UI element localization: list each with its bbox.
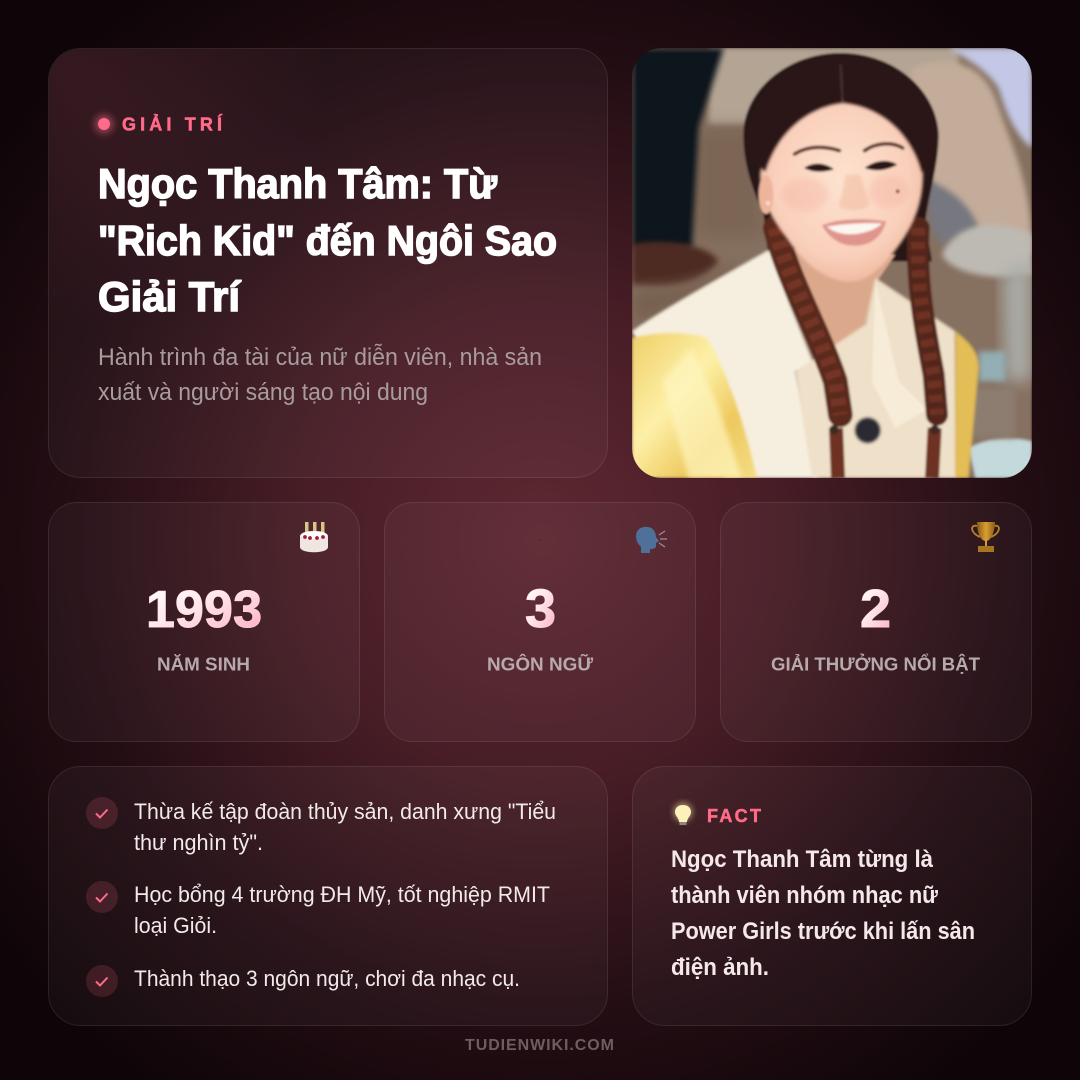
title: "Rich Kid" đến Ngôi Sao (98, 217, 557, 264)
panel: fact (632, 766, 1032, 1026)
icon: trophy (972, 522, 999, 552)
list item: languages: Thành thạo 3 ngôn ngữ, chơi đa nhạc cụ. (134, 966, 520, 991)
icon: speaking head (636, 527, 667, 553)
gold right (955, 331, 979, 478)
shirt (795, 278, 957, 478)
fact text: Ngọc Thanh Tâm từng là (671, 846, 934, 873)
fact text: điện ảnh. (671, 954, 769, 981)
list item: education: Học bổng 4 trường ĐH Mỹ, tốt nghiệp RMIT (134, 882, 550, 907)
category tag: GIẢI TRÍ (122, 114, 223, 134)
subtitle: Hành trình đa tài của nữ diễn viên, nhà sản (98, 344, 542, 371)
label: NĂM SINH (157, 654, 250, 674)
fact text: thành viên nhóm nhạc nữ (671, 882, 939, 909)
panel: highlights list (48, 766, 608, 1026)
list item: education: loại Giỏi. (134, 913, 217, 938)
title: Ngọc Thanh Tâm: Từ (98, 160, 498, 207)
title: Giải Trí (98, 273, 241, 320)
neck (793, 248, 897, 346)
value: 2 (860, 579, 891, 639)
gold sleeve (632, 333, 757, 478)
list item: heritage: thư nghìn tỷ". (134, 830, 263, 855)
braids (775, 228, 939, 478)
panel: stat languages (384, 502, 696, 742)
panel: header (48, 48, 608, 478)
list item: education (86, 881, 550, 938)
icon: light bulb (673, 802, 693, 825)
list item: heritage (86, 797, 556, 855)
hair back (743, 53, 939, 261)
label: GIẢI THƯỞNG NỔI BẬT (771, 654, 980, 674)
photo background (632, 48, 1032, 478)
subtitle: xuất và người sáng tạo nội dung (98, 379, 428, 406)
footer: TUDIENWIKI.COM (465, 1037, 614, 1054)
microphone (855, 418, 880, 443)
fact heading: FACT (707, 806, 761, 826)
hair part (839, 65, 843, 105)
list item: languages (86, 965, 520, 997)
top hair over forehead (758, 62, 845, 173)
photo: portrait (632, 48, 1032, 478)
value: 3 (525, 579, 556, 639)
value: 1993 (146, 581, 262, 639)
title (98, 160, 557, 320)
subtitle (98, 344, 542, 406)
panel: stat awards (720, 502, 1032, 742)
fact text (671, 846, 975, 981)
panel: stat birth year (48, 502, 360, 742)
face (759, 100, 923, 282)
label: NGÔN NGỮ (487, 654, 593, 674)
fact text: Power Girls trước khi lấn sân (671, 918, 975, 945)
jacket left (632, 248, 819, 478)
icon: birthday cake (300, 522, 328, 552)
list item: heritage: Thừa kế tập đoàn thủy sản, danh xưng "Tiểu (134, 799, 556, 824)
